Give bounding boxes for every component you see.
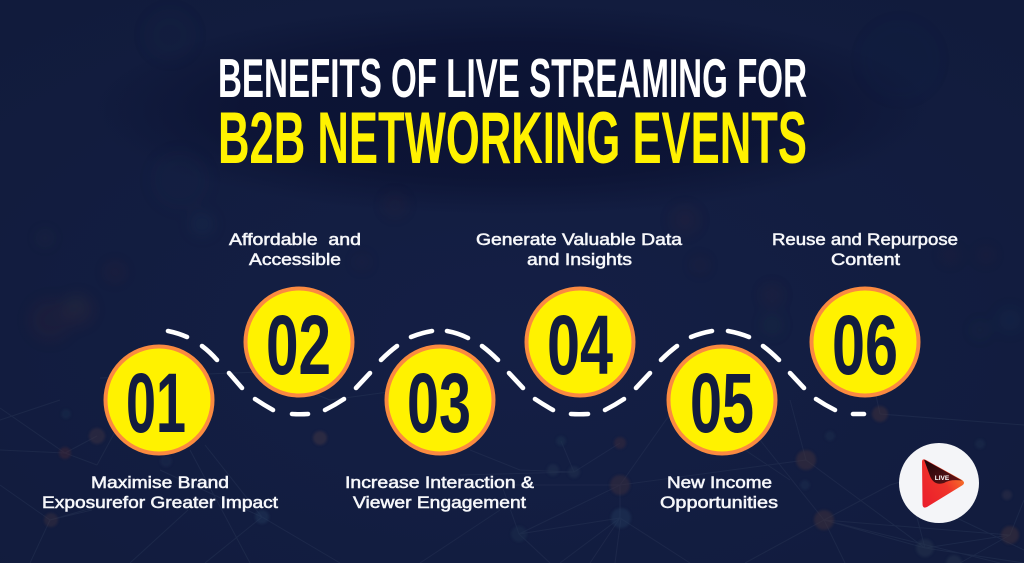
label 02 [229, 231, 361, 269]
label 01: Exposurefor Greater Impact [42, 494, 278, 512]
label 02: Affordable and [229, 231, 361, 249]
label 05: Opportunities [660, 494, 778, 512]
badge 01 [106, 346, 212, 454]
number 05: 05 [690, 356, 754, 450]
label 02: Accessible [249, 251, 341, 269]
number 02: 02 [266, 298, 331, 392]
label 03: Viewer Engagement [353, 494, 526, 512]
label 03 [345, 474, 534, 512]
step 05 [660, 346, 778, 512]
label 01: Maximise Brand [91, 474, 229, 492]
step 02 [229, 231, 361, 396]
step 03 [345, 346, 534, 512]
title [218, 47, 807, 179]
step 06 [772, 231, 958, 396]
label 04: Generate Valuable Data [476, 231, 683, 249]
dashed wavy connector [168, 331, 864, 414]
label 04: and Insights [527, 251, 632, 269]
number 03: 03 [407, 356, 471, 450]
label 06: Content [831, 251, 900, 269]
badge 05 [668, 346, 776, 454]
number 04: 04 [547, 298, 613, 392]
label 06: Reuse and Repurpose [772, 231, 958, 249]
label 01 [42, 474, 278, 512]
badge 03 [386, 346, 494, 454]
badge 06 [812, 288, 918, 396]
label 03: Increase Interaction & [345, 474, 534, 492]
label 04 [476, 231, 683, 269]
badge 02 [246, 288, 352, 396]
step 04 [476, 231, 683, 396]
label 06 [772, 231, 958, 269]
icon: live logo: LIVE [935, 475, 950, 482]
icon: live logo [899, 443, 979, 523]
label 05 [660, 474, 778, 512]
number 06: 06 [832, 298, 898, 392]
number 01: 01 [126, 356, 186, 450]
badge 04 [526, 288, 634, 396]
label 05: New Income [667, 474, 772, 492]
step 01 [42, 346, 278, 512]
